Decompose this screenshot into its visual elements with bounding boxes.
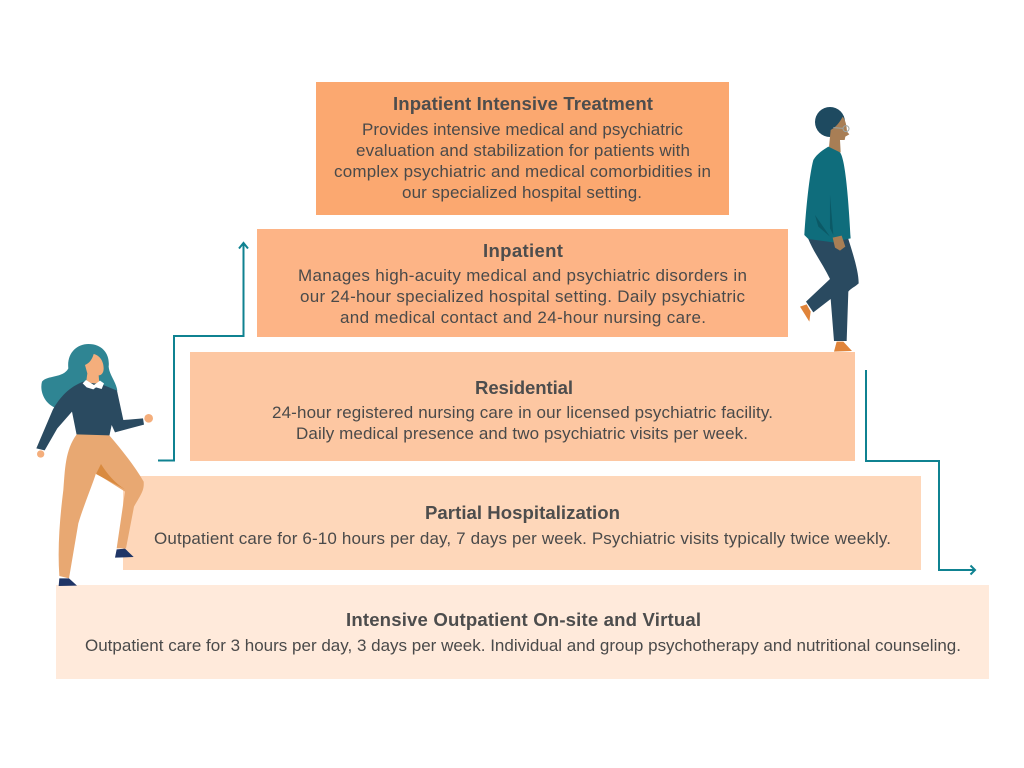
text block: residential description	[272, 403, 773, 443]
heading: Residential: Residential	[475, 377, 573, 398]
text block: intensive outpatient description: Outpatient care for 3 hours per day, 3 days per week. Individual and group psychotherapy and nutritional counseling.	[85, 636, 961, 655]
panel: Residential	[190, 352, 855, 461]
text block: intensive treatment description: Provides intensive medical and psychiatric	[362, 120, 684, 139]
icon: woman climbing steps	[36, 344, 153, 586]
text block: inpatient description: our 24-hour specialized hospital setting. Daily psychiatric	[300, 287, 746, 306]
text block: intensive treatment description: our specialized hospital setting.	[402, 183, 642, 202]
text block: inpatient description: and medical contact and 24-hour nursing care.	[340, 308, 706, 327]
text block: inpatient description: Manages high-acuity medical and psychiatric disorders in	[298, 266, 747, 285]
text block: residential description: Daily medical presence and two psychiatric visits per week.	[296, 424, 748, 443]
panel: Partial Hospitalization	[123, 476, 921, 570]
arrow: step down	[866, 370, 975, 574]
icon: man walking down steps	[800, 107, 859, 352]
panel: Inpatient	[257, 229, 788, 337]
text block: intensive treatment description: complex psychiatric and medical comorbidities in	[334, 162, 711, 181]
heading: Intensive Outpatient On-site and Virtual: Intensive Outpatient On-site and Virtual	[346, 609, 701, 630]
heading: Partial Hospitalization: Partial Hospitalization	[425, 502, 620, 523]
heading: Inpatient: Inpatient	[483, 240, 563, 261]
text block: inpatient description	[298, 266, 747, 327]
text block: partial hospitalization description: Outpatient care for 6-10 hours per day, 7 days per week. Psychiatric visits typically twice weekly.	[154, 529, 891, 548]
heading: Inpatient Intensive Treatment: Inpatient Intensive Treatment	[393, 93, 653, 114]
text block: intensive treatment description: evaluation and stabilization for patients with	[356, 141, 690, 160]
panel: Inpatient Intensive Treatment	[316, 82, 729, 215]
text block: intensive treatment description	[334, 120, 711, 202]
arrow: step up	[158, 243, 248, 460]
text block: residential description: 24-hour registered nursing care in our licensed psychiatric facility.	[272, 403, 773, 422]
panel: Intensive Outpatient	[56, 585, 989, 679]
